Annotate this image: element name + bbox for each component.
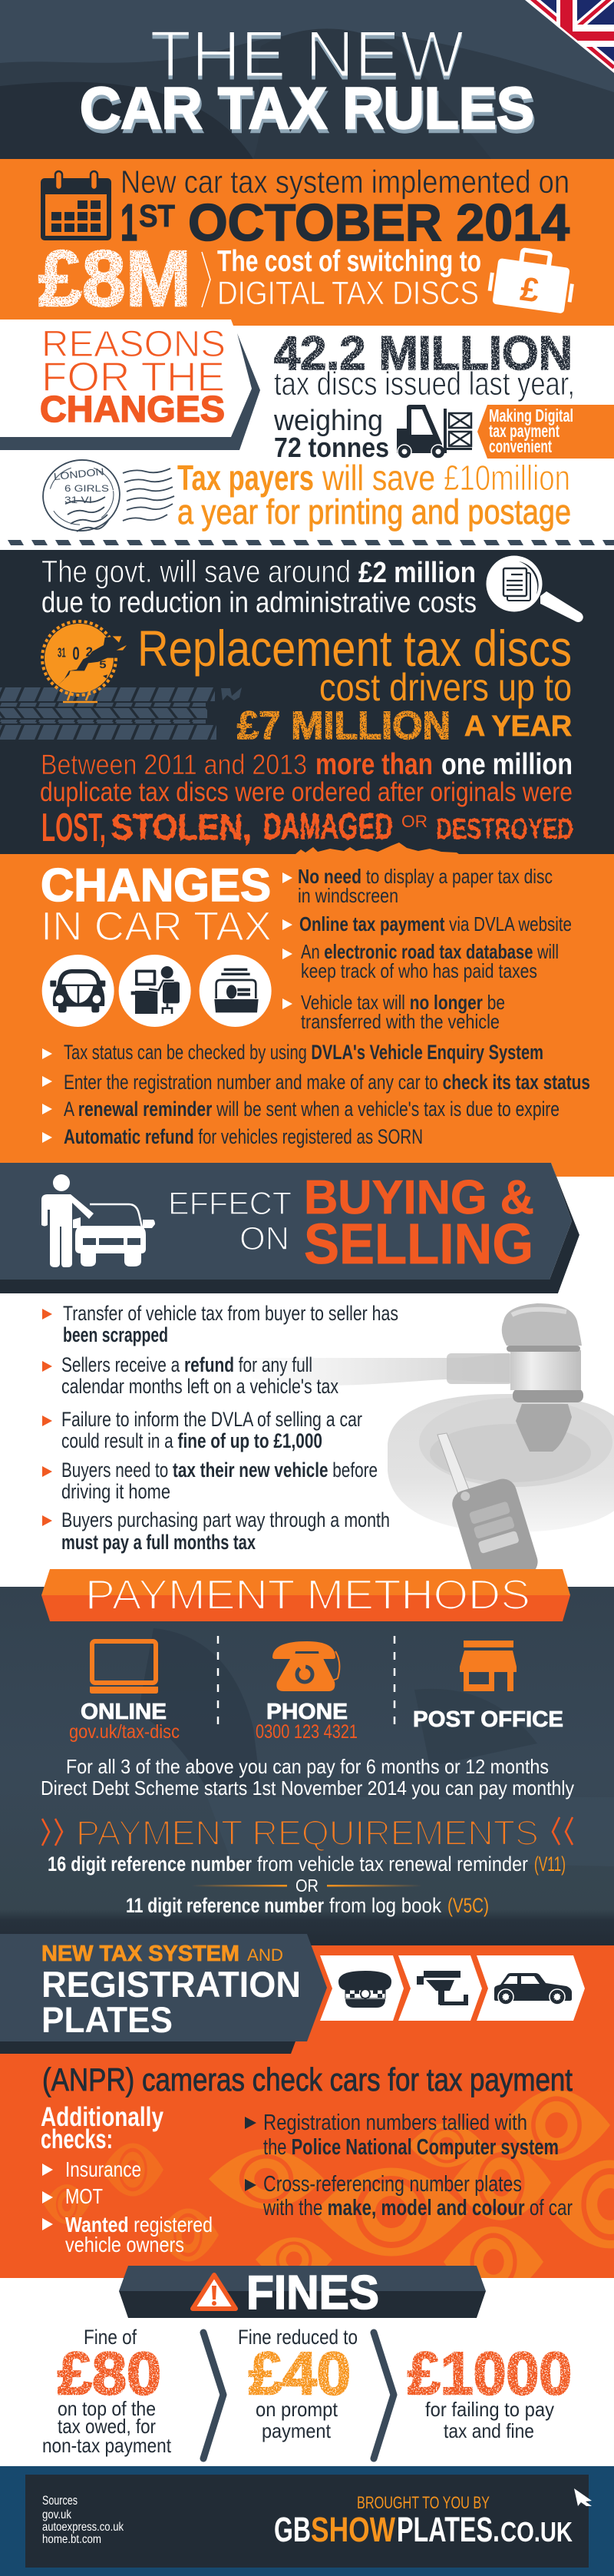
column: fine reduced to £40: on prompt bbox=[256, 2398, 338, 2421]
icon: magnifying glass bbox=[487, 556, 583, 622]
list: upper bullets: No need to display a paper tax disc bbox=[298, 865, 553, 888]
icon: person at computer bbox=[119, 955, 191, 1027]
icon: torn tax disc: 0 bbox=[72, 644, 80, 664]
icon: chevrons bbox=[42, 1817, 573, 1846]
list: buying and selling points: Buyers purchasing part way through a month bbox=[61, 1508, 390, 1531]
list: buying and selling points: must pay a full months tax bbox=[61, 1531, 256, 1554]
list: lower bullets bbox=[42, 1041, 590, 1148]
list: upper bullets: keep track of who has paid taxes bbox=[301, 959, 537, 982]
text: payment terms: For all 3 of the above you can pay for 6 months or 12 months bbox=[66, 1755, 549, 1778]
stat: £7 million a year bbox=[237, 704, 572, 747]
text: 11 digit reference: (V5C) bbox=[447, 1894, 489, 1917]
text: tax payers will save: Tax payers bbox=[177, 458, 314, 498]
list: upper bullets: An electronic road tax database will bbox=[301, 940, 559, 963]
list: additional checks: MOT bbox=[65, 2184, 103, 2208]
text: lost stolen damaged or destroyed: LOST, bbox=[41, 806, 106, 850]
icon: car chevron bbox=[477, 1955, 585, 2021]
text: lost stolen damaged or destroyed: OR bbox=[401, 812, 427, 831]
label: phone: 0300 123 4321 bbox=[256, 1721, 358, 1743]
list: buying and selling points: calendar months left on a vehicle's tax bbox=[61, 1375, 338, 1398]
text: payment terms bbox=[41, 1755, 574, 1800]
stat: £7 million a year: A YEAR bbox=[464, 710, 572, 743]
panel: header bbox=[0, 0, 614, 159]
list: upper bullets: in windscreen bbox=[298, 884, 398, 907]
text: 72 tonnes: 72 tonnes bbox=[274, 432, 389, 463]
text: between 2011 and 2013: more than bbox=[315, 748, 433, 781]
logo: gb show plates: SHOW bbox=[311, 2510, 395, 2549]
list: upper bullets bbox=[282, 865, 572, 1033]
heading: payment requirements: PAYMENT REQUIREMENTS bbox=[76, 1813, 539, 1853]
text: sources: home.bt.com bbox=[42, 2533, 101, 2546]
text: cost of switching: The cost of switching to bbox=[217, 245, 481, 278]
icon: person with car bbox=[41, 1174, 155, 1267]
logo: gb show plates: CO.UK bbox=[500, 2516, 573, 2548]
banner: fines bbox=[119, 2266, 486, 2319]
text: lost stolen damaged or destroyed: DAMAGED bbox=[263, 806, 393, 846]
text: tax payers will save: £10million bbox=[444, 458, 570, 498]
column: fine reduced to £40 bbox=[238, 2326, 358, 2442]
heading: changes: CHANGES bbox=[41, 859, 271, 911]
divider: dashed bbox=[218, 1636, 394, 1733]
icon: laptop bbox=[90, 1641, 158, 1694]
decoration: eye pattern bbox=[44, 2090, 614, 2297]
list: lower bullets: Automatic refund for vehicles registered as SORN bbox=[64, 1125, 423, 1148]
text: lost stolen damaged or destroyed: DESTROYED bbox=[436, 813, 573, 846]
icon: briefcase bbox=[486, 246, 578, 315]
text: additionally checks: Additionally bbox=[41, 2102, 163, 2132]
text: 16 digit reference: 16 digit reference number bbox=[48, 1853, 252, 1876]
column: fine reduced to £40: Fine reduced to bbox=[238, 2326, 358, 2349]
list: buying and selling points: been scrapped bbox=[63, 1323, 168, 1346]
label: phone bbox=[256, 1700, 358, 1743]
icon: calendar bbox=[41, 171, 111, 240]
text: govt will save: £2 million bbox=[358, 557, 476, 589]
column: fine of £80: Fine of bbox=[84, 2326, 137, 2349]
icon: post office shop bbox=[460, 1641, 517, 1691]
label: phone: PHONE bbox=[266, 1700, 348, 1724]
list: buying and selling points: Sellers receive a refund for any full bbox=[61, 1353, 312, 1376]
text: between 2011 and 2013 bbox=[41, 748, 573, 781]
arrow: heading bracket bbox=[0, 333, 260, 450]
list: additional checks: vehicle owners bbox=[65, 2233, 184, 2256]
column: fine of £80: on top of the bbox=[58, 2397, 156, 2420]
text: between 2011 and 2013: one million bbox=[441, 748, 573, 781]
banner: fines: FINES bbox=[246, 2266, 379, 2319]
icon: warning triangle bbox=[193, 2275, 236, 2309]
text: additionally checks bbox=[41, 2102, 163, 2154]
heading: buying and selling bbox=[304, 1171, 534, 1276]
icon: torn tax disc: 2 bbox=[86, 644, 93, 659]
panel: reasons for the changes bbox=[0, 320, 614, 550]
text: lost stolen damaged or destroyed: STOLEN, bbox=[111, 806, 252, 847]
logo: gb show plates bbox=[274, 2510, 573, 2549]
text: 11 digit reference bbox=[126, 1894, 489, 1917]
heading: reasons for the changes: FOR THE bbox=[41, 354, 225, 400]
icon: torn tax disc bbox=[42, 621, 127, 702]
text: cost drivers up to: cost drivers up to bbox=[319, 666, 572, 709]
panel: implementation date bbox=[0, 159, 614, 326]
heading: reasons for the changes: REASONS bbox=[41, 324, 226, 365]
column: fine of £80 bbox=[42, 2326, 172, 2457]
icon: car front bbox=[42, 955, 114, 1027]
callout: making digital tax payment convenient: Making Digital bbox=[489, 406, 573, 425]
heading: in car tax: IN CAR TAX bbox=[41, 904, 272, 949]
callout: making digital tax payment convenient: tax payment bbox=[489, 421, 560, 441]
icon: card file bbox=[200, 955, 272, 1027]
text: sources: autoexpress.co.uk bbox=[42, 2521, 124, 2534]
icon: police hat chevron bbox=[320, 1955, 404, 2021]
list: buying and selling points: could result in a fine of up to £1,000 bbox=[61, 1429, 322, 1452]
icon: briefcase: £ bbox=[518, 270, 542, 310]
text: digital tax discs: DIGITAL TAX DISCS bbox=[217, 275, 479, 312]
text: additionally checks: checks: bbox=[41, 2124, 113, 2154]
date: 1st october 2014: OCTOBER 2014 bbox=[188, 194, 569, 252]
heading: reasons for the changes: CHANGES bbox=[40, 389, 225, 430]
panel: payment methods bbox=[0, 1569, 614, 1945]
list: buying and selling points: driving it home bbox=[61, 1480, 170, 1503]
text: 16 digit reference bbox=[48, 1853, 566, 1876]
panel: changes in car tax bbox=[0, 843, 614, 1163]
list: lower bullets: Tax status can be checked by using DVLA's Vehicle Enquiry System bbox=[64, 1041, 543, 1064]
icon: torn tax disc: 5 bbox=[99, 658, 107, 670]
panel: registration plates bbox=[0, 1934, 614, 2297]
heading: effect on: EFFECT bbox=[168, 1185, 292, 1221]
text: govt will save: The govt. will save around bbox=[41, 554, 351, 589]
list: camera checks bbox=[245, 2111, 573, 2220]
column: fine reduced to £40: payment bbox=[262, 2419, 332, 2442]
heading banner: new tax system and registration plates: PLATES bbox=[41, 1999, 173, 2040]
icon: postmark stamp: 31 VI bbox=[64, 495, 92, 505]
text: 11 digit reference: 11 digit reference number bbox=[126, 1894, 324, 1917]
list: buying and selling points: Buyers need to tax their new vehicle before bbox=[61, 1459, 378, 1482]
splatter bbox=[295, 843, 459, 854]
label: online: ONLINE bbox=[81, 1700, 167, 1724]
heading: buying and selling: BUYING & bbox=[304, 1171, 534, 1224]
flag bbox=[522, 0, 614, 77]
stat: £8M: £8M bbox=[38, 234, 191, 323]
text: tax payers will save: will save bbox=[322, 458, 435, 498]
label: online bbox=[69, 1700, 180, 1743]
icon: cursor bbox=[574, 2488, 592, 2506]
heading banner: new tax system and registration plates bbox=[0, 1934, 327, 2054]
stat: 42.2 million: 42.2 MILLION bbox=[274, 327, 573, 380]
label: post office: POST OFFICE bbox=[413, 1707, 563, 1732]
column: £1000: for failing to pay bbox=[425, 2398, 554, 2421]
heading banner: new tax system and registration plates: REGISTRATION bbox=[41, 1964, 301, 2005]
text: or divider: OR bbox=[295, 1876, 319, 1896]
text: sources bbox=[42, 2493, 124, 2546]
arrow: chevron one bbox=[203, 2333, 223, 2458]
column: fine of £80: non-tax payment bbox=[42, 2434, 172, 2457]
date: 1st october 2014: 1 bbox=[120, 194, 137, 252]
heading: effect on bbox=[168, 1185, 292, 1257]
text: brought to you by: BROUGHT TO YOU BY bbox=[357, 2493, 490, 2512]
text: between 2011 and 2013: Between 2011 and 2013 bbox=[41, 749, 307, 780]
list: additional checks bbox=[42, 2157, 213, 2256]
title: the new: THE NEW bbox=[150, 22, 464, 95]
icon: telephone bbox=[272, 1641, 339, 1691]
list: camera checks: with the make, model and colour of car bbox=[262, 2196, 573, 2220]
callout: making digital tax payment convenient bbox=[477, 405, 614, 459]
column: fine of £80: tax owed, for bbox=[58, 2415, 156, 2438]
date: 1st october 2014: ST bbox=[139, 198, 175, 233]
text: sources: gov.uk bbox=[42, 2508, 72, 2521]
text: 11 digit reference: from log book bbox=[329, 1894, 441, 1917]
icon: postmark stamp: LONDON bbox=[53, 465, 104, 482]
panel: effect on buying and selling banner bbox=[0, 1163, 614, 1293]
banner: payment methods: PAYMENT METHODS bbox=[85, 1571, 530, 1618]
column: £1000: £1000 bbox=[408, 2339, 572, 2407]
list: additional checks: Insurance bbox=[65, 2157, 141, 2181]
panel: footer bbox=[0, 2466, 614, 2576]
panel: buying and selling bullets bbox=[42, 1235, 614, 1569]
title: car tax rules: CAR TAX RULES bbox=[81, 80, 536, 145]
title: car tax rules: CAR TAX RULES bbox=[80, 76, 534, 141]
list: upper bullets: Online tax payment via DVLA website bbox=[299, 912, 572, 935]
image: gavel and car key bbox=[238, 1303, 614, 1591]
arrow: thin chevron bbox=[202, 252, 210, 307]
callout: making digital tax payment convenient: convenient bbox=[489, 436, 552, 456]
title: the new: THE NEW bbox=[150, 18, 464, 91]
heading: effect on: ON bbox=[239, 1220, 289, 1257]
panel: fines bbox=[0, 2266, 614, 2466]
logo: gb show plates: GB bbox=[274, 2510, 311, 2549]
list: camera checks: Registration numbers tallied with bbox=[263, 2111, 527, 2135]
icon: postmark stamp bbox=[38, 455, 174, 536]
icon: cctv chevron bbox=[398, 1955, 482, 2021]
column: fine reduced to £40: £40 bbox=[249, 2339, 351, 2407]
column: £1000: tax and fine bbox=[444, 2419, 534, 2442]
column: £1000 bbox=[408, 2339, 572, 2442]
list: upper bullets: transferred with the vehicle bbox=[301, 1010, 500, 1033]
heading banner: new tax system and registration plates: NEW TAX SYSTEM bbox=[41, 1942, 239, 1966]
stat: £7 million a year: £7 MILLION bbox=[237, 704, 451, 747]
list: additional checks: Wanted registered bbox=[65, 2213, 213, 2237]
text: lost stolen damaged or destroyed bbox=[41, 806, 573, 850]
column: fine of £80: £80 bbox=[58, 2339, 161, 2407]
text: sources: Sources bbox=[42, 2493, 78, 2508]
label: online: gov.uk/tax-disc bbox=[69, 1721, 180, 1743]
heading banner: new tax system and registration plates: AND bbox=[247, 1945, 283, 1965]
text: administrative costs: due to reduction in administrative costs bbox=[41, 587, 477, 619]
list: camera checks: Cross-referencing number plates bbox=[263, 2172, 522, 2197]
heading: reasons for the changes bbox=[40, 324, 226, 430]
text: 16 digit reference: (V11) bbox=[534, 1853, 566, 1876]
list: buying and selling points: Failure to inform the DVLA of selling a car bbox=[61, 1408, 362, 1431]
icon: postmark stamp: 6 GIRLS bbox=[64, 483, 109, 494]
list: upper bullets: Vehicle tax will no longer be bbox=[301, 991, 505, 1014]
logo: gb show plates: PLATES. bbox=[397, 2510, 500, 2549]
icon: forklift bbox=[397, 405, 472, 459]
text: weighing: weighing bbox=[273, 405, 383, 437]
list: buying and selling points bbox=[42, 1302, 398, 1554]
illustration: tyre track bbox=[0, 687, 242, 740]
list: buying and selling points: Transfer of vehicle tax from buyer to seller has bbox=[63, 1302, 398, 1325]
heading: buying and selling: SELLING bbox=[304, 1212, 533, 1276]
text: 16 digit reference: from vehicle tax renewal reminder bbox=[257, 1853, 528, 1876]
text: tax payers will save bbox=[177, 458, 570, 498]
title: the new: THE NEW bbox=[150, 20, 464, 94]
panel: dark savings bbox=[0, 550, 614, 854]
icon: torn tax disc: 31 bbox=[58, 645, 66, 661]
arrow: chevron two bbox=[374, 2333, 394, 2458]
